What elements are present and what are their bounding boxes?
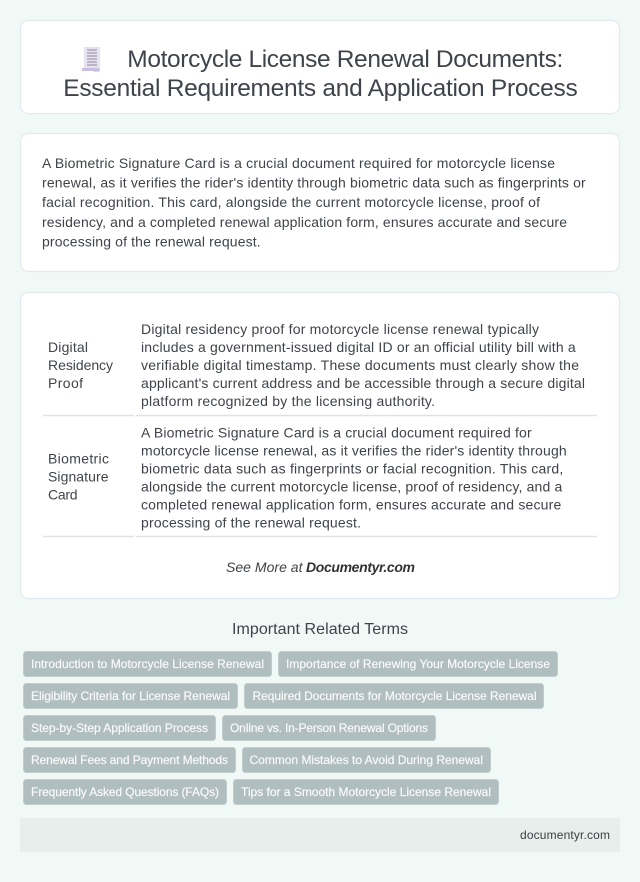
table row: Biometric Signature Card: processing of the renewal request. — [141, 514, 361, 530]
text block: summary: facial recognition. This card, alongside the current motorcycle license, proof of — [42, 194, 540, 210]
tag: Eligibility Criteria for License Renewal — [31, 689, 230, 703]
table row: Biometric Signature Card — [43, 424, 597, 536]
tag — [222, 716, 436, 740]
text block: summary: processing of the renewal request. — [42, 233, 261, 249]
table row: Biometric Signature Card: alongside the current motorcycle license, proof of residency, and a — [141, 478, 563, 494]
footer — [20, 818, 620, 852]
panel: title card — [20, 20, 620, 114]
table row: Biometric Signature Card: Biometric — [48, 450, 109, 466]
footer: documentyr.com — [520, 828, 610, 842]
table row: Biometric Signature Card: Card — [48, 486, 78, 502]
table row: Digital Residency Proof: Digital residency proof for motorcycle license renewal typically — [141, 321, 539, 337]
table row: Digital Residency Proof: verifiable digital timestamp. These documents must clearly show the — [141, 357, 579, 373]
tag — [24, 780, 226, 804]
table row: Digital Residency Proof: includes a government-issued digital ID or an official utility bill with a — [141, 339, 576, 355]
table row: Digital Residency Proof: Digital — [48, 339, 88, 355]
panel: summary paragraph — [20, 134, 620, 272]
title — [63, 46, 578, 102]
tag — [24, 716, 216, 740]
table row: Digital Residency Proof: applicant's current address and be accessible through a secure digital — [141, 375, 585, 391]
tag: Importance of Renewing Your Motorcycle License — [286, 657, 550, 671]
heading: important related terms: Important Related Terms — [232, 621, 408, 638]
title: Essential Requirements and Application Process — [63, 75, 578, 102]
text block: summary: residency, and a completed renewal application form, ensures accurate and secure — [42, 214, 567, 230]
tag — [24, 652, 272, 676]
tag — [278, 652, 558, 676]
table row: Digital Residency Proof: platform recognized by the licensing authority. — [141, 393, 435, 409]
tag — [244, 684, 544, 708]
table row: Biometric Signature Card: completed renewal application form, ensures accurate and secure — [141, 496, 562, 512]
table row: Biometric Signature Card: A Biometric Signature Card is a crucial document required for — [141, 424, 532, 440]
link: see more: Documentyr.com — [306, 559, 415, 575]
tag — [24, 684, 238, 708]
panel: documents table — [20, 292, 620, 598]
tag: Step-by-Step Application Process — [31, 721, 208, 735]
link: see more: See More at — [226, 559, 304, 575]
tag: Common Mistakes to Avoid During Renewal — [250, 753, 483, 767]
table row: Biometric Signature Card: biometric data such as fingerprints or facial recognition. This card, — [141, 460, 563, 476]
icon: document scroll — [82, 47, 100, 72]
tag: Tips for a Smooth Motorcycle License Renewal — [241, 785, 491, 799]
tag: Renewal Fees and Payment Methods — [31, 753, 228, 767]
text block: summary: renewal, as it verifies the rider's identity through biometric data such as fingerprints or — [42, 175, 586, 191]
link: see more — [226, 559, 415, 575]
tag: Introduction to Motorcycle License Renewal — [31, 657, 264, 671]
tag: Online vs. In-Person Renewal Options — [230, 721, 428, 735]
table row: Digital Residency Proof — [43, 321, 597, 416]
text block: summary: A Biometric Signature Card is a crucial document required for motorcycle license — [42, 155, 555, 171]
title: Motorcycle License Renewal Documents: — [127, 46, 563, 73]
tag — [24, 748, 236, 772]
tag: Required Documents for Motorcycle License Renewal — [252, 689, 536, 703]
table row: Digital Residency Proof: Residency — [48, 357, 113, 373]
table row: Biometric Signature Card: motorcycle license renewal, as it verifies the rider's identity through — [141, 442, 567, 458]
table row: Biometric Signature Card: Signature — [48, 468, 109, 484]
tag list: related terms — [24, 652, 558, 804]
text block: summary — [42, 155, 586, 249]
table row: Digital Residency Proof: Proof — [48, 375, 83, 391]
tag — [234, 780, 498, 804]
tag — [242, 748, 490, 772]
tag: Frequently Asked Questions (FAQs) — [31, 785, 219, 799]
